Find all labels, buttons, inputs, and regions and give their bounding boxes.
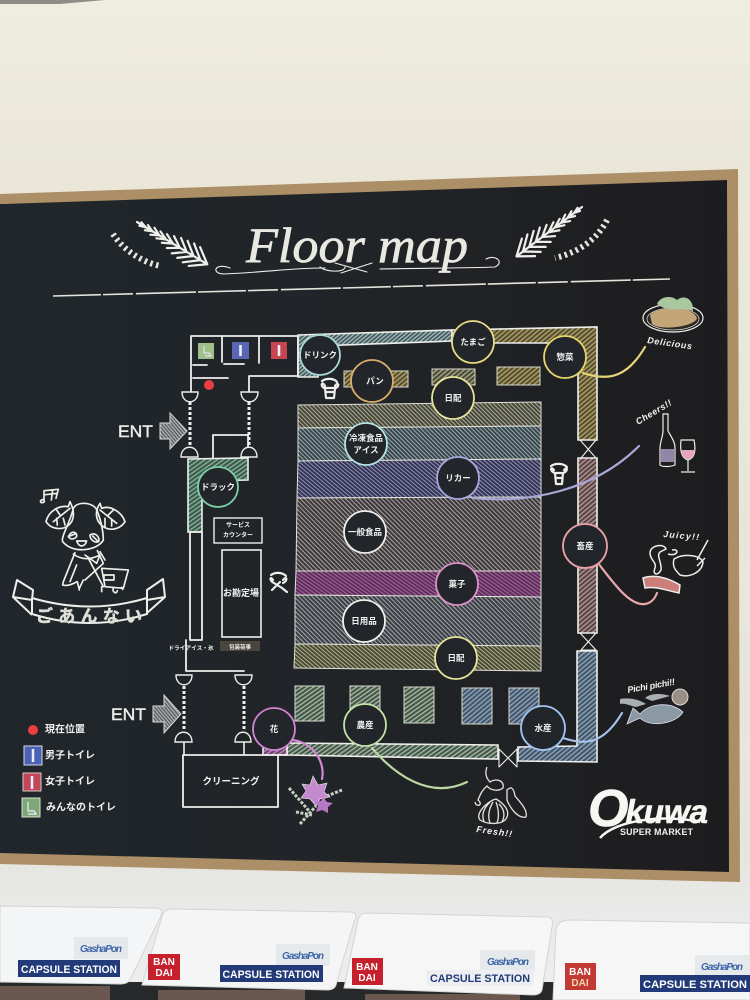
circle: general food: 一般食品 bbox=[348, 527, 382, 537]
circle: sweets: 菓子 bbox=[448, 579, 466, 589]
aisle: general foods bbox=[296, 497, 541, 571]
legend: men: 男子トイレ bbox=[45, 750, 95, 762]
mascot body bbox=[63, 551, 105, 590]
block: produce 3 bbox=[404, 687, 434, 723]
onion bbox=[479, 799, 508, 823]
right wheat decoration bbox=[510, 198, 607, 265]
dashed title rule bbox=[53, 279, 670, 296]
illustration: bottle bbox=[660, 414, 675, 466]
upper door chains bbox=[190, 402, 249, 446]
circle: frozen foods bbox=[345, 423, 387, 465]
dry ice locker bbox=[186, 532, 244, 671]
block: chilled bbox=[432, 369, 475, 385]
machine 4 label bbox=[640, 975, 750, 992]
bottle label bbox=[661, 449, 674, 462]
entrance label upper: ENT bbox=[118, 423, 153, 441]
poster strips bbox=[0, 986, 520, 1000]
chalkboard surface bbox=[0, 180, 729, 872]
lower door posts bbox=[175, 675, 252, 742]
circle: drugstore: ドラック bbox=[201, 482, 235, 492]
callout curve: flowers bbox=[290, 740, 323, 779]
machine 3 Bandai: BAN bbox=[356, 962, 378, 973]
circle: general food bbox=[344, 511, 386, 553]
perimeter corridors bbox=[188, 327, 597, 762]
machine 2 Bandai bbox=[148, 954, 180, 980]
corridor: drugstore bbox=[188, 458, 248, 532]
arrow: upper entrance bbox=[160, 413, 187, 449]
mascot illustration bbox=[41, 489, 128, 593]
illustration: vegetables bbox=[475, 767, 526, 823]
machine 1 small logo bbox=[74, 937, 128, 959]
wooden frame bbox=[0, 169, 740, 882]
circle: daily goods bbox=[343, 600, 385, 642]
circle: drinks bbox=[300, 335, 340, 375]
logo: Okuwa Super Market: kuwa bbox=[625, 793, 708, 830]
block: seafood 1 bbox=[462, 688, 492, 724]
block: seafood 2 bbox=[509, 688, 539, 724]
circle: liquor: リカー bbox=[445, 473, 471, 483]
logo: Okuwa Super Market: O bbox=[588, 780, 628, 838]
circle: frozen foods: アイス bbox=[353, 445, 379, 455]
block: bread bbox=[344, 371, 408, 387]
machine 3 bbox=[344, 913, 552, 995]
circle: chilled bottom bbox=[435, 637, 477, 679]
corridor: produce bbox=[287, 743, 498, 759]
dry ice label: ドライアイス・氷 bbox=[168, 644, 214, 652]
door: lower right bbox=[580, 633, 596, 650]
label: Cheers: Cheers!! bbox=[634, 398, 673, 427]
restroom icons on map bbox=[198, 342, 287, 359]
banner title: ごあんない bbox=[36, 606, 142, 626]
left wheat decoration bbox=[113, 213, 213, 274]
circle: side dishes bbox=[544, 336, 586, 378]
music notes bbox=[41, 489, 58, 503]
packing table bbox=[220, 641, 260, 651]
legend: current position: 現在位置 bbox=[45, 722, 85, 736]
circle: produce: 農産 bbox=[356, 720, 374, 730]
small left sprig bbox=[113, 234, 161, 266]
arrow: lower entrance bbox=[153, 695, 181, 733]
corridor doors bbox=[499, 440, 596, 767]
machine 2 bbox=[142, 909, 356, 990]
circle: seafood: 水産 bbox=[534, 723, 552, 733]
machine 1 small logo: GashaPon bbox=[80, 944, 122, 955]
lower door chains bbox=[184, 686, 244, 731]
eggplant bbox=[507, 788, 526, 817]
machine 4 Bandai bbox=[565, 963, 596, 990]
section circles bbox=[198, 321, 607, 750]
callout curve: fresh bbox=[372, 748, 467, 788]
small fish 2 bbox=[645, 694, 670, 701]
machine bases bbox=[0, 982, 750, 1000]
circle: drinks: ドリンク bbox=[303, 350, 337, 360]
circle: chilled top: 日配 bbox=[444, 393, 462, 403]
checkout bbox=[222, 550, 261, 637]
service counter: カウンター bbox=[223, 531, 253, 539]
machine 2 Bandai: DAI bbox=[155, 968, 173, 979]
machine 3 small logo bbox=[480, 950, 535, 972]
logo subtitle: SUPER MARKET bbox=[620, 827, 694, 837]
restroom walls bbox=[191, 336, 298, 392]
label: Fresh: Fresh!! bbox=[476, 824, 513, 839]
icon: accessible toilet bbox=[198, 343, 214, 359]
capsule machines bbox=[0, 906, 750, 1000]
illustration: wine glass bbox=[681, 440, 695, 472]
small room above drugstore bbox=[213, 435, 248, 458]
aisle: chilled foods bbox=[294, 644, 541, 671]
corridor: drinks bbox=[298, 330, 452, 377]
circle: eggs bbox=[452, 321, 494, 363]
machine 4 bbox=[553, 920, 750, 1000]
icon: women toilet bbox=[271, 342, 287, 359]
machine 3 label: CAPSULE STATION bbox=[430, 973, 530, 985]
machine 1 label bbox=[18, 960, 120, 977]
small blossom bbox=[315, 797, 333, 813]
wine bbox=[681, 450, 695, 459]
aisle: frozen foods bbox=[298, 426, 541, 461]
small mascot: right bbox=[551, 464, 567, 484]
upper door posts bbox=[181, 392, 258, 457]
legend bbox=[22, 722, 116, 817]
illustration: fish bbox=[620, 689, 688, 724]
callout curve: delicious bbox=[583, 347, 645, 377]
small display blocks bbox=[295, 367, 540, 724]
cleaning label: クリーニング bbox=[202, 776, 260, 788]
circle: side dishes: 惣菜 bbox=[556, 352, 574, 362]
food illustration: plate bbox=[643, 297, 703, 332]
entrance label lower: ENT bbox=[111, 706, 146, 724]
aisle: daily goods bbox=[295, 595, 541, 646]
aisle: olive row bbox=[298, 402, 541, 428]
illustration: meat bbox=[643, 540, 708, 593]
service counter bbox=[214, 518, 262, 543]
shell bbox=[672, 689, 688, 705]
door: upper right bbox=[580, 440, 596, 458]
circle: bread: パン bbox=[366, 376, 384, 386]
leaves bbox=[289, 788, 342, 824]
circle: bread bbox=[351, 360, 393, 402]
title: Floor map: Floor map bbox=[245, 217, 468, 273]
block: side dish bbox=[497, 367, 540, 385]
machine 3 small logo: GashaPon bbox=[487, 957, 529, 968]
shopping cart bbox=[88, 558, 128, 593]
callout curve: cheers bbox=[473, 446, 639, 499]
circle: daily goods: 日用品 bbox=[351, 616, 377, 626]
circle: meat bbox=[563, 524, 607, 568]
cleaning shop bbox=[183, 755, 278, 807]
banner with text bbox=[13, 579, 165, 626]
circle: meat: 畜産 bbox=[576, 541, 594, 551]
label: Juicy: Juicy!! bbox=[663, 529, 700, 542]
machine 1 label: CAPSULE STATION bbox=[21, 964, 117, 976]
circle: chilled bottom: 日配 bbox=[447, 653, 465, 663]
title flourish bbox=[216, 257, 499, 274]
legend: accessible: みんなのトイレ bbox=[46, 802, 116, 814]
callout curve: juicy bbox=[598, 563, 657, 604]
machine 4 small logo: GashaPon bbox=[701, 962, 743, 973]
left leaf hair bbox=[46, 502, 73, 529]
checkout: お勘定場 bbox=[223, 587, 259, 598]
circle: drugstore bbox=[198, 467, 238, 507]
lower door legs bbox=[184, 742, 244, 755]
right leaf hair bbox=[97, 503, 125, 529]
machine 1 bbox=[0, 906, 162, 984]
small mascot: center bbox=[270, 573, 287, 592]
bacon bbox=[643, 576, 680, 593]
legend: women: 女子トイレ bbox=[45, 774, 95, 788]
logo: Okuwa Super Market bbox=[588, 780, 708, 838]
service counter: サービス bbox=[226, 521, 250, 529]
illustration: flowers bbox=[289, 776, 342, 824]
circle: sweets bbox=[436, 563, 478, 605]
machine 4 small logo bbox=[695, 955, 750, 977]
small mascot: top bbox=[322, 379, 338, 398]
circle: frozen foods: 冷凍食品 bbox=[349, 433, 383, 443]
machine 3 Bandai bbox=[352, 958, 383, 985]
tonkatsu bbox=[650, 308, 697, 328]
machine 4 Bandai: BAN bbox=[569, 967, 591, 978]
aisle: liquor bbox=[297, 459, 541, 498]
store sections: main aisle block bbox=[294, 402, 541, 671]
corridor: eggs and side dishes bbox=[452, 327, 597, 440]
entrance doors bbox=[175, 392, 258, 755]
circle: flowers bbox=[253, 708, 295, 750]
label: Delicious: Delicious bbox=[647, 335, 693, 351]
mascot face bbox=[68, 532, 99, 546]
machine 2 small logo bbox=[276, 944, 330, 966]
small fish bbox=[620, 698, 646, 707]
machine 2 label: CAPSULE STATION bbox=[222, 969, 320, 981]
banner ribbon bbox=[13, 579, 165, 623]
bottom wall bbox=[278, 754, 287, 756]
circle: produce bbox=[344, 704, 386, 746]
machine 2 small logo: GashaPon bbox=[282, 951, 324, 962]
circle: eggs: たまご bbox=[460, 337, 486, 347]
circle: chilled top bbox=[432, 377, 474, 419]
small right sprig bbox=[555, 220, 607, 258]
store walls and rooms bbox=[183, 336, 298, 807]
machine 4 Bandai: DAI bbox=[571, 978, 589, 989]
callout curve: pichi pichi bbox=[563, 713, 622, 742]
mascot head bbox=[62, 503, 103, 550]
machine 3 Bandai: DAI bbox=[358, 973, 376, 984]
block: produce 2 bbox=[350, 686, 380, 722]
logo swoosh bbox=[600, 819, 700, 838]
machine 4 label: CAPSULE STATION bbox=[643, 979, 747, 991]
plate inner ring bbox=[647, 308, 699, 330]
circle: seafood bbox=[521, 706, 565, 750]
corridor: seafood bbox=[518, 651, 597, 762]
circle: liquor bbox=[437, 457, 479, 499]
aisle: confectionery bbox=[295, 571, 541, 597]
door: bottom bbox=[499, 749, 517, 767]
machine 2 Bandai: BAN bbox=[153, 957, 175, 968]
machine 2 label bbox=[220, 965, 323, 982]
packing table: 包装荷事 bbox=[229, 643, 251, 651]
icon: men toilet bbox=[232, 342, 249, 359]
garnish bbox=[657, 297, 693, 311]
blossom bbox=[301, 776, 330, 806]
corridor: flowers bbox=[263, 743, 287, 755]
label: Pichi pichi: Pichi pichi!! bbox=[627, 677, 676, 695]
corridor: meat bbox=[578, 458, 597, 633]
circle: flowers: 花 bbox=[270, 724, 279, 734]
current location dot bbox=[204, 380, 214, 390]
block: produce 1 bbox=[295, 686, 324, 721]
top edge shadow bbox=[0, 0, 105, 4]
